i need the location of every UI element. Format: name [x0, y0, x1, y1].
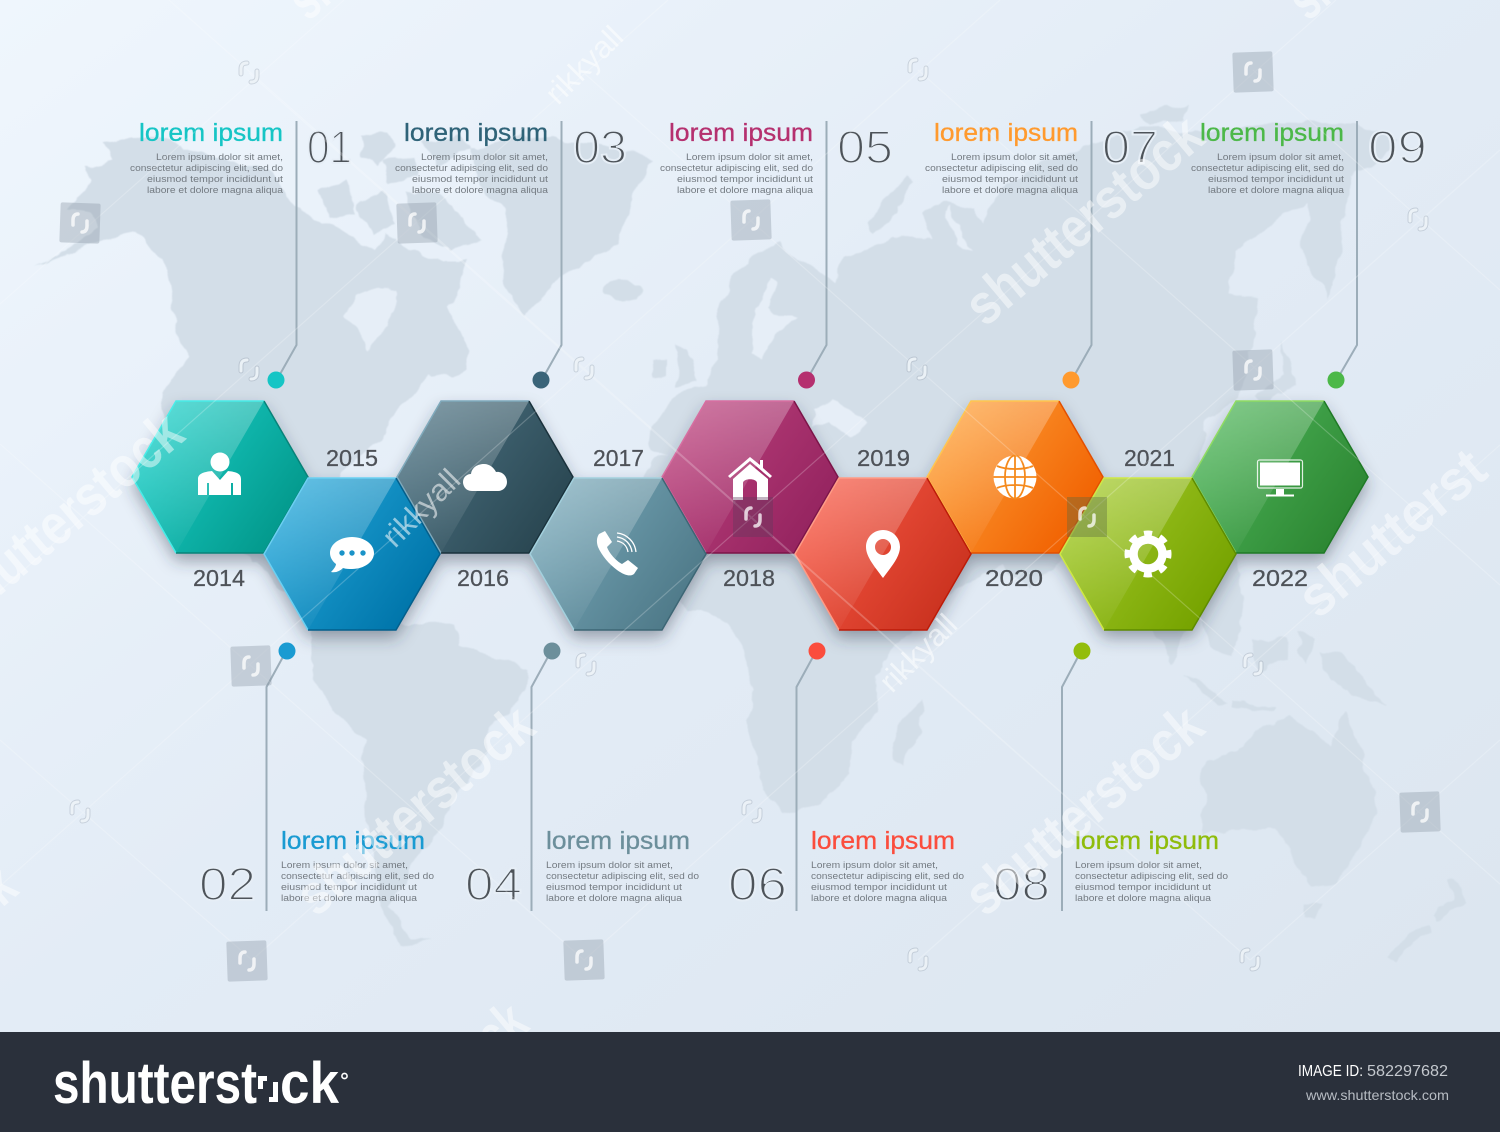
text block 03: eiusmod tempor incididunt ut: [412, 174, 549, 184]
text block 02: [199, 827, 434, 910]
icon: chat bubble: [330, 537, 374, 572]
connector 08: [1062, 642, 1090, 911]
connector 02: [266, 642, 296, 911]
text block 07: Lorem ipsum dolor sit amet,: [951, 152, 1078, 162]
text block 08: lorem ipsum: [1075, 827, 1219, 855]
text block 09: Lorem ipsum dolor sit amet,: [1217, 152, 1344, 162]
arctic islands: [318, 130, 480, 250]
hexagon 2018 house: [662, 401, 838, 553]
iceland: [604, 279, 640, 301]
madagascar: [889, 700, 925, 765]
text block 06: eiusmod tempor incididunt ut: [811, 882, 948, 892]
year labels: [193, 445, 1308, 591]
connector 05: [798, 121, 826, 388]
text block 05: 05: [837, 121, 893, 173]
year labels: 2015: [326, 445, 378, 471]
website: www.shutterstock.com: [1305, 1087, 1449, 1103]
icon: monitor: [1258, 460, 1302, 496]
text block 02: eiusmod tempor incididunt ut: [281, 882, 418, 892]
new zealand: [1385, 878, 1465, 962]
text block 02: Lorem ipsum dolor sit amet,: [281, 860, 408, 870]
text block 02: labore et dolore magna aliqua: [281, 893, 417, 903]
black sea: [812, 400, 866, 434]
text block 04: labore et dolore magna aliqua: [546, 893, 682, 903]
watermark text shutterstock: shutterstock: [283, 692, 547, 928]
image id: [1298, 1063, 1448, 1080]
icon: location pin: [866, 530, 900, 578]
hexagon 2016 cloud: [397, 401, 573, 553]
connector 04: [532, 642, 560, 911]
hexagon 2019 pin: [795, 478, 971, 630]
hexagon 2015 chat: [264, 478, 440, 630]
text block 03: lorem ipsum: [404, 119, 548, 147]
text block 05: labore et dolore magna aliqua: [677, 185, 813, 195]
text block 08: [993, 827, 1228, 910]
eurasia: [650, 122, 1396, 663]
year labels: 2021: [1124, 445, 1175, 471]
text block 01: [130, 119, 352, 195]
south america: [312, 623, 528, 945]
text block 08: consectetur adipiscing elit, sed do: [1075, 871, 1228, 881]
text block 07: consectetur adipiscing elit, sed do: [925, 163, 1078, 173]
text block 04: Lorem ipsum dolor sit amet,: [546, 860, 673, 870]
text block 07: 07: [1102, 121, 1158, 173]
japan: [1254, 340, 1296, 402]
text block 09: eiusmod tempor incididunt ut: [1208, 174, 1345, 184]
text block 06: 06: [728, 858, 787, 910]
north america: [36, 135, 470, 600]
year labels: 2022: [1252, 565, 1308, 591]
world map: [36, 105, 1465, 962]
text block 06: labore et dolore magna aliqua: [811, 893, 947, 903]
text block 09: labore et dolore magna aliqua: [1208, 185, 1344, 195]
text block 03: [395, 119, 627, 195]
year labels: 2014: [193, 565, 245, 591]
novaya zemlya: [868, 177, 912, 232]
greenland: [470, 135, 655, 317]
british isles: [652, 345, 697, 388]
text block 02: lorem ipsum: [281, 827, 425, 855]
text block 01: labore et dolore magna aliqua: [147, 185, 283, 195]
watermark text rikkyall: rikkyall: [375, 462, 467, 554]
text block 05: lorem ipsum: [669, 119, 813, 147]
connector 01: [268, 121, 296, 388]
text block 05: eiusmod tempor incididunt ut: [677, 174, 814, 184]
watermark squares: [59, 51, 1441, 982]
text block 07: eiusmod tempor incididunt ut: [942, 174, 1079, 184]
hexagon 2022 monitor: [1192, 401, 1368, 553]
text block 08: eiusmod tempor incididunt ut: [1075, 882, 1212, 892]
hexagon 2017 phone: [530, 478, 706, 630]
text block 03: Lorem ipsum dolor sit amet,: [421, 152, 548, 162]
text block 04: consectetur adipiscing elit, sed do: [546, 871, 699, 881]
text block 06: consectetur adipiscing elit, sed do: [811, 871, 964, 881]
year labels: 2016: [457, 565, 509, 591]
image id: IMAGE ID:: [1298, 1063, 1363, 1080]
watermark text rikkyall: rikkyall: [872, 607, 964, 699]
watermark text shutterstock: shutterstock: [952, 692, 1216, 928]
text block 03: consectetur adipiscing elit, sed do: [395, 163, 548, 173]
text block 05: consectetur adipiscing elit, sed do: [660, 163, 813, 173]
text block 09: [1191, 119, 1427, 195]
text block 04: lorem ipsum: [546, 827, 690, 855]
australia: [1200, 713, 1377, 887]
ob gulf: [945, 205, 972, 250]
text block 06: lorem ipsum: [811, 827, 955, 855]
text block 08: Lorem ipsum dolor sit amet,: [1075, 860, 1202, 870]
text block 03: labore et dolore magna aliqua: [412, 185, 548, 195]
text block 09: lorem ipsum: [1200, 119, 1344, 147]
hexagon 2021 gear: [1060, 478, 1236, 630]
icon: house: [728, 457, 772, 500]
icon: gear: [1124, 530, 1172, 578]
connector 06: [796, 642, 826, 911]
text block 05: Lorem ipsum dolor sit amet,: [686, 152, 813, 162]
baltic: [752, 280, 800, 360]
text block 07: [925, 119, 1158, 195]
hexagon 2020 globe: [927, 401, 1103, 553]
year labels: 2018: [723, 565, 775, 591]
text block 05: [660, 119, 893, 195]
arctic archipelagos: [1142, 105, 1190, 125]
watermark text shutterstock: shutterstock: [952, 102, 1216, 338]
text block 02: 02: [199, 858, 256, 910]
text block 01: 01: [307, 121, 352, 173]
connector 03: [532, 121, 562, 388]
icon: phone: [597, 531, 638, 575]
text block 09: 09: [1368, 121, 1427, 173]
text block 01: lorem ipsum: [139, 119, 283, 147]
text block 03: 03: [573, 121, 627, 173]
tasmania: [1302, 902, 1322, 920]
text block 04: [465, 827, 699, 910]
watermark text rikkyall: [375, 19, 964, 699]
year labels: 2020: [985, 565, 1043, 591]
watermark text shutterstock: ck: [463, 989, 540, 1068]
hexagon 2014 person: [132, 401, 308, 553]
footer bar: [0, 1032, 1500, 1132]
text block 07: lorem ipsum: [934, 119, 1078, 147]
watermark outline marks: [72, 60, 1426, 969]
text block 07: labore et dolore magna aliqua: [942, 185, 1078, 195]
southeast asia islands: [1180, 630, 1386, 712]
text block 06: [728, 827, 964, 910]
text block 06: Lorem ipsum dolor sit amet,: [811, 860, 938, 870]
text block 01: Lorem ipsum dolor sit amet,: [156, 152, 283, 162]
footer logo: ck: [280, 1051, 340, 1116]
text block 02: consectetur adipiscing elit, sed do: [281, 871, 434, 881]
text block 08: 08: [993, 858, 1050, 910]
footer logo: shutterst: [53, 1051, 257, 1116]
year labels: 2019: [857, 445, 910, 471]
icon: globe: [994, 456, 1036, 498]
icon: cloud: [463, 464, 507, 491]
connector 07: [1062, 121, 1092, 388]
text block 04: 04: [465, 858, 522, 910]
hudson bay: [345, 285, 398, 352]
text block 08: labore et dolore magna aliqua: [1075, 893, 1211, 903]
image id: 582297682: [1367, 1063, 1448, 1080]
text block 09: consectetur adipiscing elit, sed do: [1191, 163, 1344, 173]
year labels: 2017: [593, 445, 644, 471]
africa: [640, 450, 940, 815]
watermark bracket marks: [73, 63, 1427, 970]
text block 01: eiusmod tempor incididunt ut: [147, 174, 284, 184]
text block 01: consectetur adipiscing elit, sed do: [130, 163, 283, 173]
icon: person: [198, 452, 241, 495]
inland seas: [345, 205, 972, 434]
connector 09: [1328, 121, 1357, 388]
watermark text rikkyall: rikkyall: [538, 19, 630, 111]
hexagon shadows: [132, 409, 1368, 638]
connector lines and dots: [266, 121, 1357, 911]
text block 04: eiusmod tempor incididunt ut: [546, 882, 683, 892]
